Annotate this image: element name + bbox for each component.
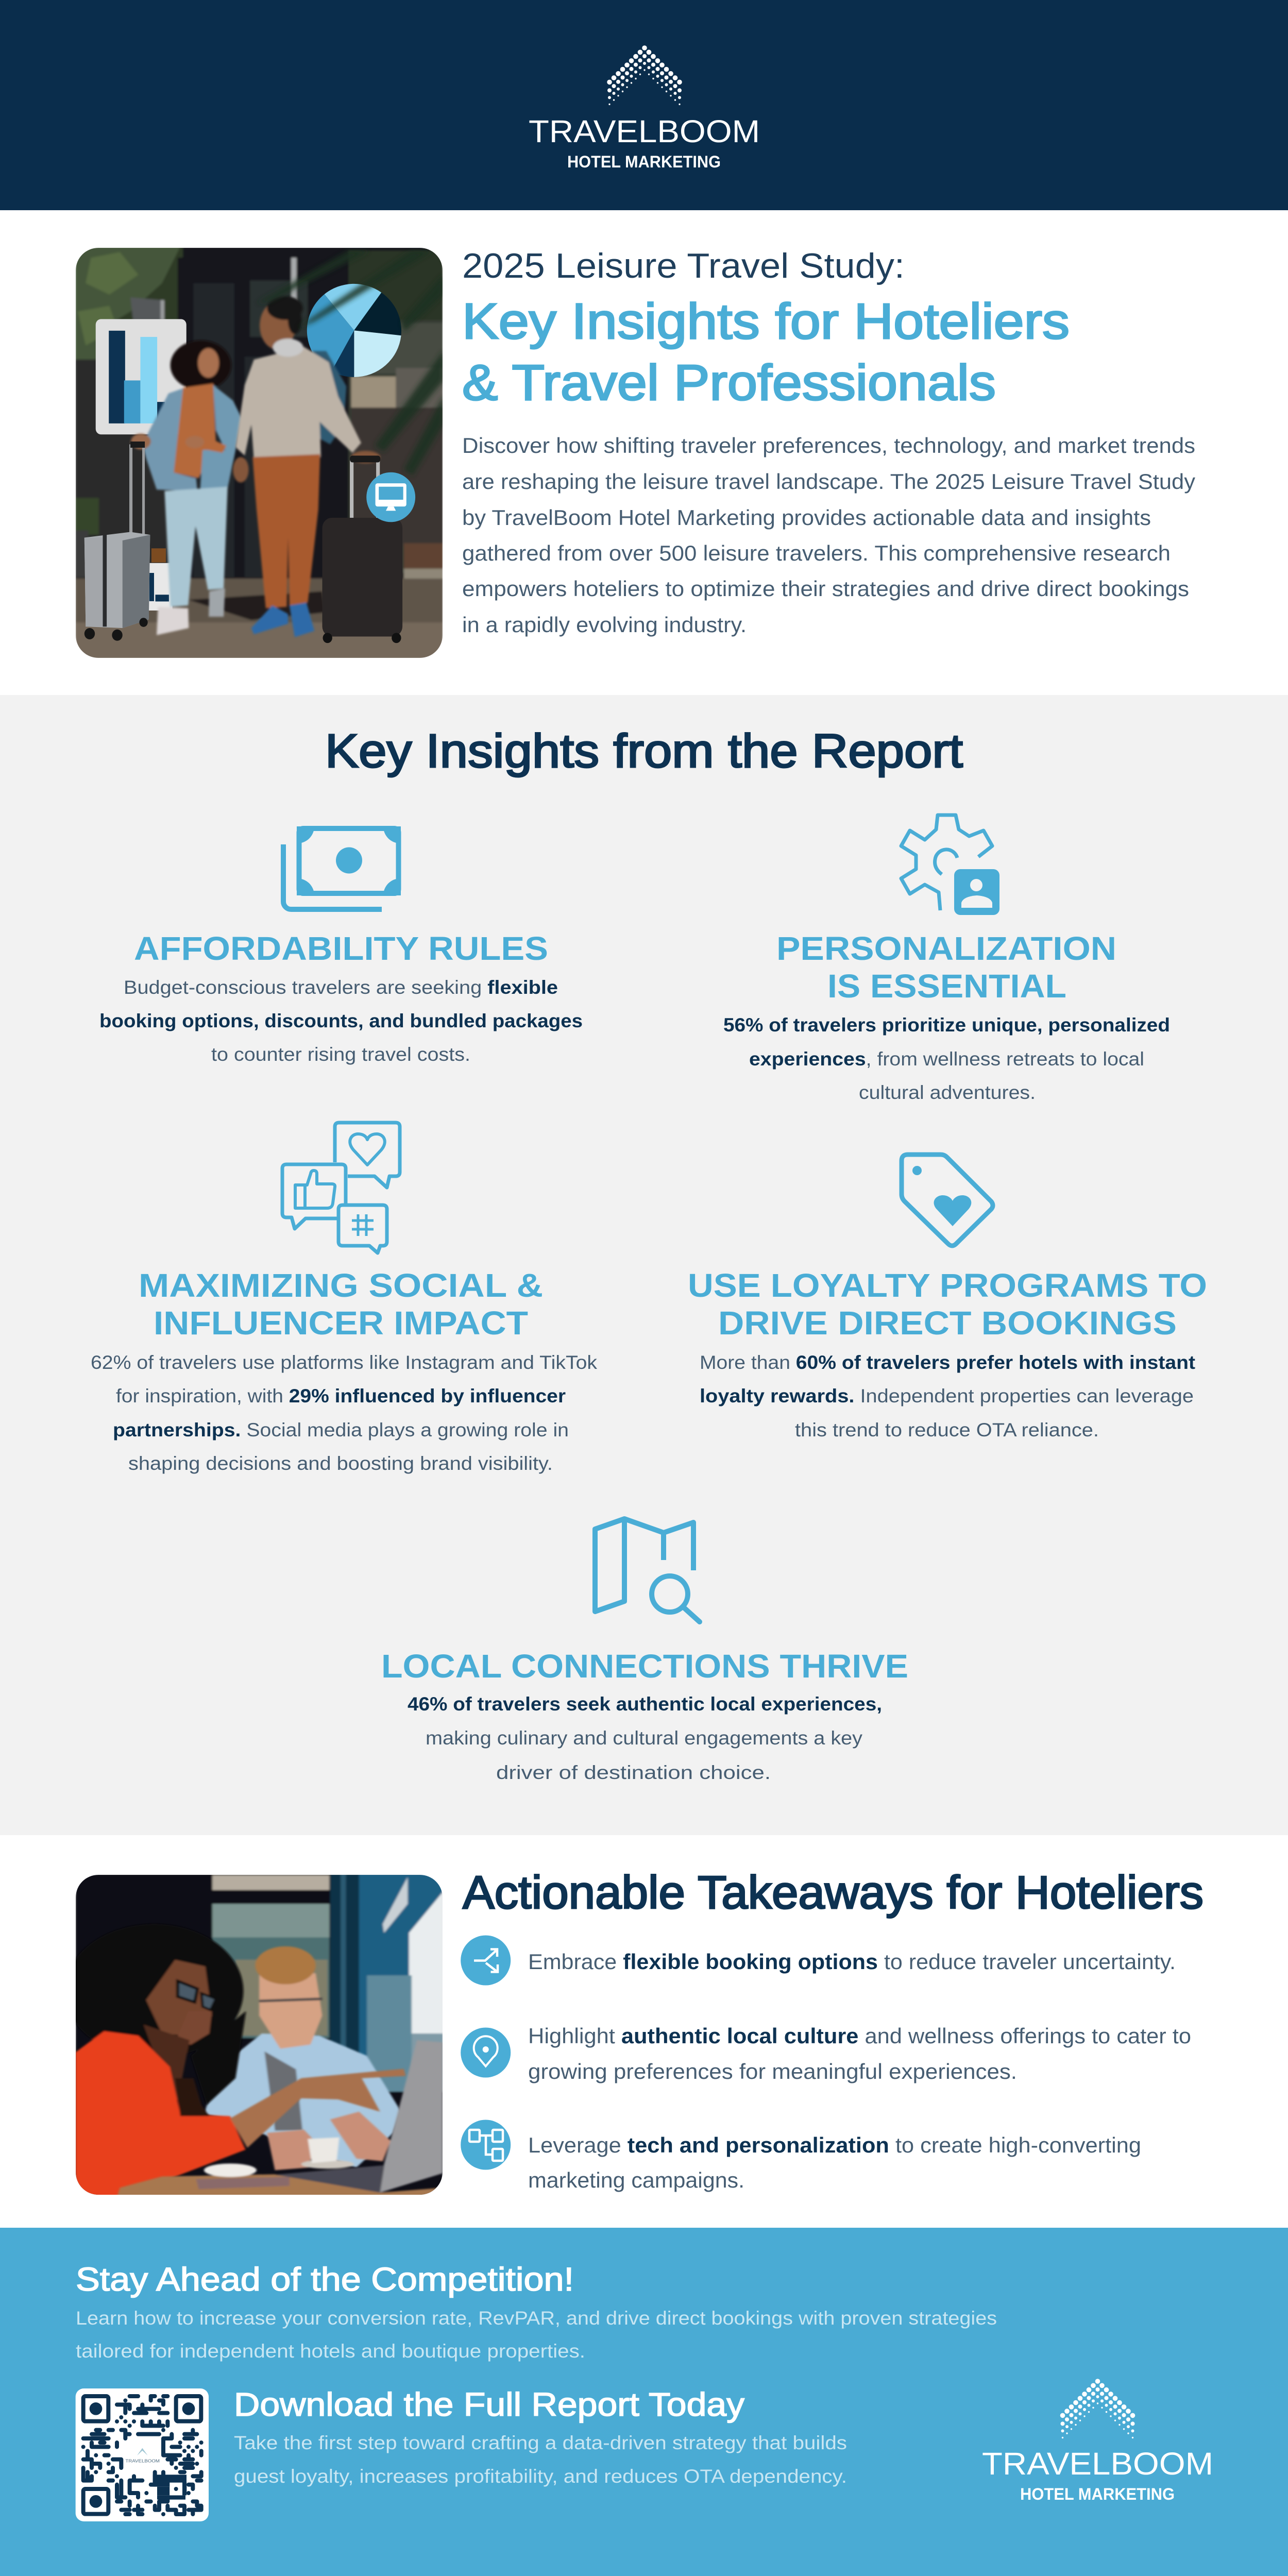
insight: affordability: to counter rising travel costs.	[211, 1044, 470, 1065]
download text: Take the first step toward crafting a data-driven strategy that builds	[234, 2432, 847, 2453]
download text	[234, 2432, 847, 2487]
takeaway: tech and personalization: Leverage tech and personalization to create high-converting	[528, 2133, 1141, 2157]
insight: loyalty programs: DRIVE DIRECT BOOKINGS	[718, 1304, 1177, 1342]
takeaway: authentic local culture: Highlight authentic local culture and wellness offerings to cater to	[528, 2024, 1191, 2048]
takeaway: flexible booking: Embrace flexible booking options to reduce traveler uncertainty.	[528, 1950, 1176, 1974]
insight: affordability	[99, 930, 583, 1065]
takeaway: authentic local culture: growing preferences for meaningful experiences.	[528, 2059, 1017, 2083]
insight: personalization: IS ESSENTIAL	[827, 968, 1066, 1005]
insight: affordability: Budget-conscious travelers are seeking flexible	[124, 977, 558, 998]
takeaway: tech and personalization	[528, 2133, 1141, 2192]
footer text	[76, 2308, 997, 2362]
icon: monitor badge	[366, 472, 415, 522]
QR centre logo	[125, 2448, 160, 2463]
insight: social and influencer	[91, 1267, 598, 1474]
footer text: Learn how to increase your conversion rate, RevPAR, and drive direct bookings with proven strategies	[76, 2308, 997, 2329]
panel: intro text	[462, 246, 1195, 637]
photo: travelers with luggage and chart overlays	[75, 246, 443, 659]
subtitle: 2025 Leisure Travel Study:	[462, 246, 905, 285]
hands, cup and laptop	[117, 2040, 443, 2197]
icon: social bubbles	[282, 1123, 400, 1253]
insight: loyalty programs: loyalty rewards. Independent properties can leverage	[700, 1385, 1194, 1406]
small card behind luggage	[149, 548, 173, 611]
title	[462, 293, 1070, 411]
right suitcase	[323, 455, 402, 643]
insight: social and influencer: shaping decisions and boosting brand visibility.	[128, 1453, 553, 1474]
download text: guest loyalty, increases profitability, and reduces OTA dependency.	[234, 2466, 847, 2487]
insight: personalization: PERSONALIZATION	[776, 930, 1116, 967]
insight: social and influencer: MAXIMIZING SOCIAL &	[139, 1267, 543, 1304]
panel: header band with logo	[0, 0, 1288, 210]
title: Key Insights for Hoteliers	[462, 293, 1070, 349]
insight: social and influencer: partnerships. Social media plays a growing role in	[113, 1419, 569, 1440]
woman figure	[65, 1924, 406, 2197]
photo: two colleagues at a laptop	[65, 1874, 443, 2197]
insight: personalization: experiences , from wellness retreats to local	[749, 1048, 1144, 1070]
left suitcase	[84, 442, 150, 641]
man figure	[233, 296, 380, 637]
intro paragraph: in a rapidly evolving industry.	[462, 613, 747, 637]
footer logo: TRAVELBOOM	[982, 2446, 1213, 2481]
icon: location pin	[461, 2028, 511, 2077]
insight: personalization	[723, 930, 1170, 1103]
icon: loyalty tag with heart	[902, 1155, 993, 1246]
takeaway: authentic local culture	[528, 2024, 1191, 2083]
chart overlay card	[96, 319, 187, 434]
title: & Travel Professionals	[462, 354, 996, 411]
footer logo	[982, 2379, 1213, 2503]
QR centre logo: TRAVELBOOM	[125, 2458, 160, 2463]
intro paragraph: by TravelBoom Hotel Marketing provides actionable data and insights	[462, 505, 1151, 530]
logo wordmark: TRAVELBOOM	[529, 114, 760, 149]
insight: personalization: 56% of travelers prioritize unique, personalized	[723, 1014, 1170, 1036]
icon: gear and profile	[901, 815, 999, 915]
QR code	[76, 2388, 209, 2521]
icon: map and magnifier	[595, 1519, 700, 1622]
intro paragraph: Discover how shifting traveler preferences, technology, and market trends	[462, 433, 1195, 457]
takeaways heading: Actionable Takeaways for Hoteliers	[463, 1867, 1204, 1919]
intro paragraph: gathered from over 500 leisure travelers. This comprehensive research	[462, 541, 1171, 565]
woman figure	[131, 341, 242, 635]
insight: local connections: making culinary and cultural engagements a key	[426, 1727, 863, 1749]
insight: social and influencer: INFLUENCER IMPACT	[154, 1304, 528, 1342]
panel: actionable takeaways	[461, 1867, 1204, 2192]
insight: affordability: booking options, discounts, and bundled packages	[99, 1010, 583, 1031]
icon: banknotes	[283, 826, 401, 909]
insight: social and influencer: for inspiration, with 29% influenced by influencer	[116, 1385, 566, 1406]
insight: loyalty programs: this trend to reduce OTA reliance.	[795, 1419, 1099, 1440]
intro paragraph: empowers hoteliers to optimize their strategies and drive direct bookings	[462, 577, 1189, 601]
icon: split arrows	[461, 1935, 511, 1986]
panel: key insights	[0, 695, 1288, 1835]
icon: flow diagram	[461, 2120, 511, 2170]
icon: logo dotted roof	[607, 45, 682, 105]
insight: local connections	[381, 1648, 908, 1783]
download heading: Download the Full Report Today	[234, 2386, 744, 2423]
insight: local connections: LOCAL CONNECTIONS THRIVE	[381, 1648, 908, 1685]
takeaway: tech and personalization: marketing campaigns.	[528, 2168, 744, 2192]
footer text: tailored for independent hotels and boutique properties.	[76, 2341, 585, 2362]
logo subtitle: HOTEL MARKETING	[567, 152, 721, 171]
insight: local connections: driver of destination choice.	[496, 1762, 771, 1783]
insight: loyalty programs: USE LOYALTY PROGRAMS TO	[688, 1267, 1207, 1304]
man figure	[204, 1946, 401, 2167]
insight: loyalty programs	[688, 1267, 1207, 1440]
insight: local connections: 46% of travelers seek authentic local experiences,	[408, 1693, 882, 1715]
insight: personalization: cultural adventures.	[859, 1082, 1036, 1103]
intro paragraph	[462, 433, 1195, 637]
intro paragraph: are reshaping the leisure travel landscape. The 2025 Leisure Travel Study	[462, 469, 1195, 494]
footer heading: Stay Ahead of the Competition!	[76, 2261, 574, 2298]
panel: footer call to action	[0, 2228, 1288, 2576]
pie chart overlay	[307, 284, 401, 377]
footer logo: HOTEL MARKETING	[1020, 2485, 1175, 2503]
insight: affordability: AFFORDABILITY RULES	[134, 930, 548, 967]
insight: loyalty programs: More than 60% of travelers prefer hotels with instant	[700, 1352, 1195, 1373]
insight: social and influencer: 62% of travelers use platforms like Instagram and TikTok	[91, 1352, 598, 1373]
section heading: Key Insights from the Report	[325, 725, 963, 777]
